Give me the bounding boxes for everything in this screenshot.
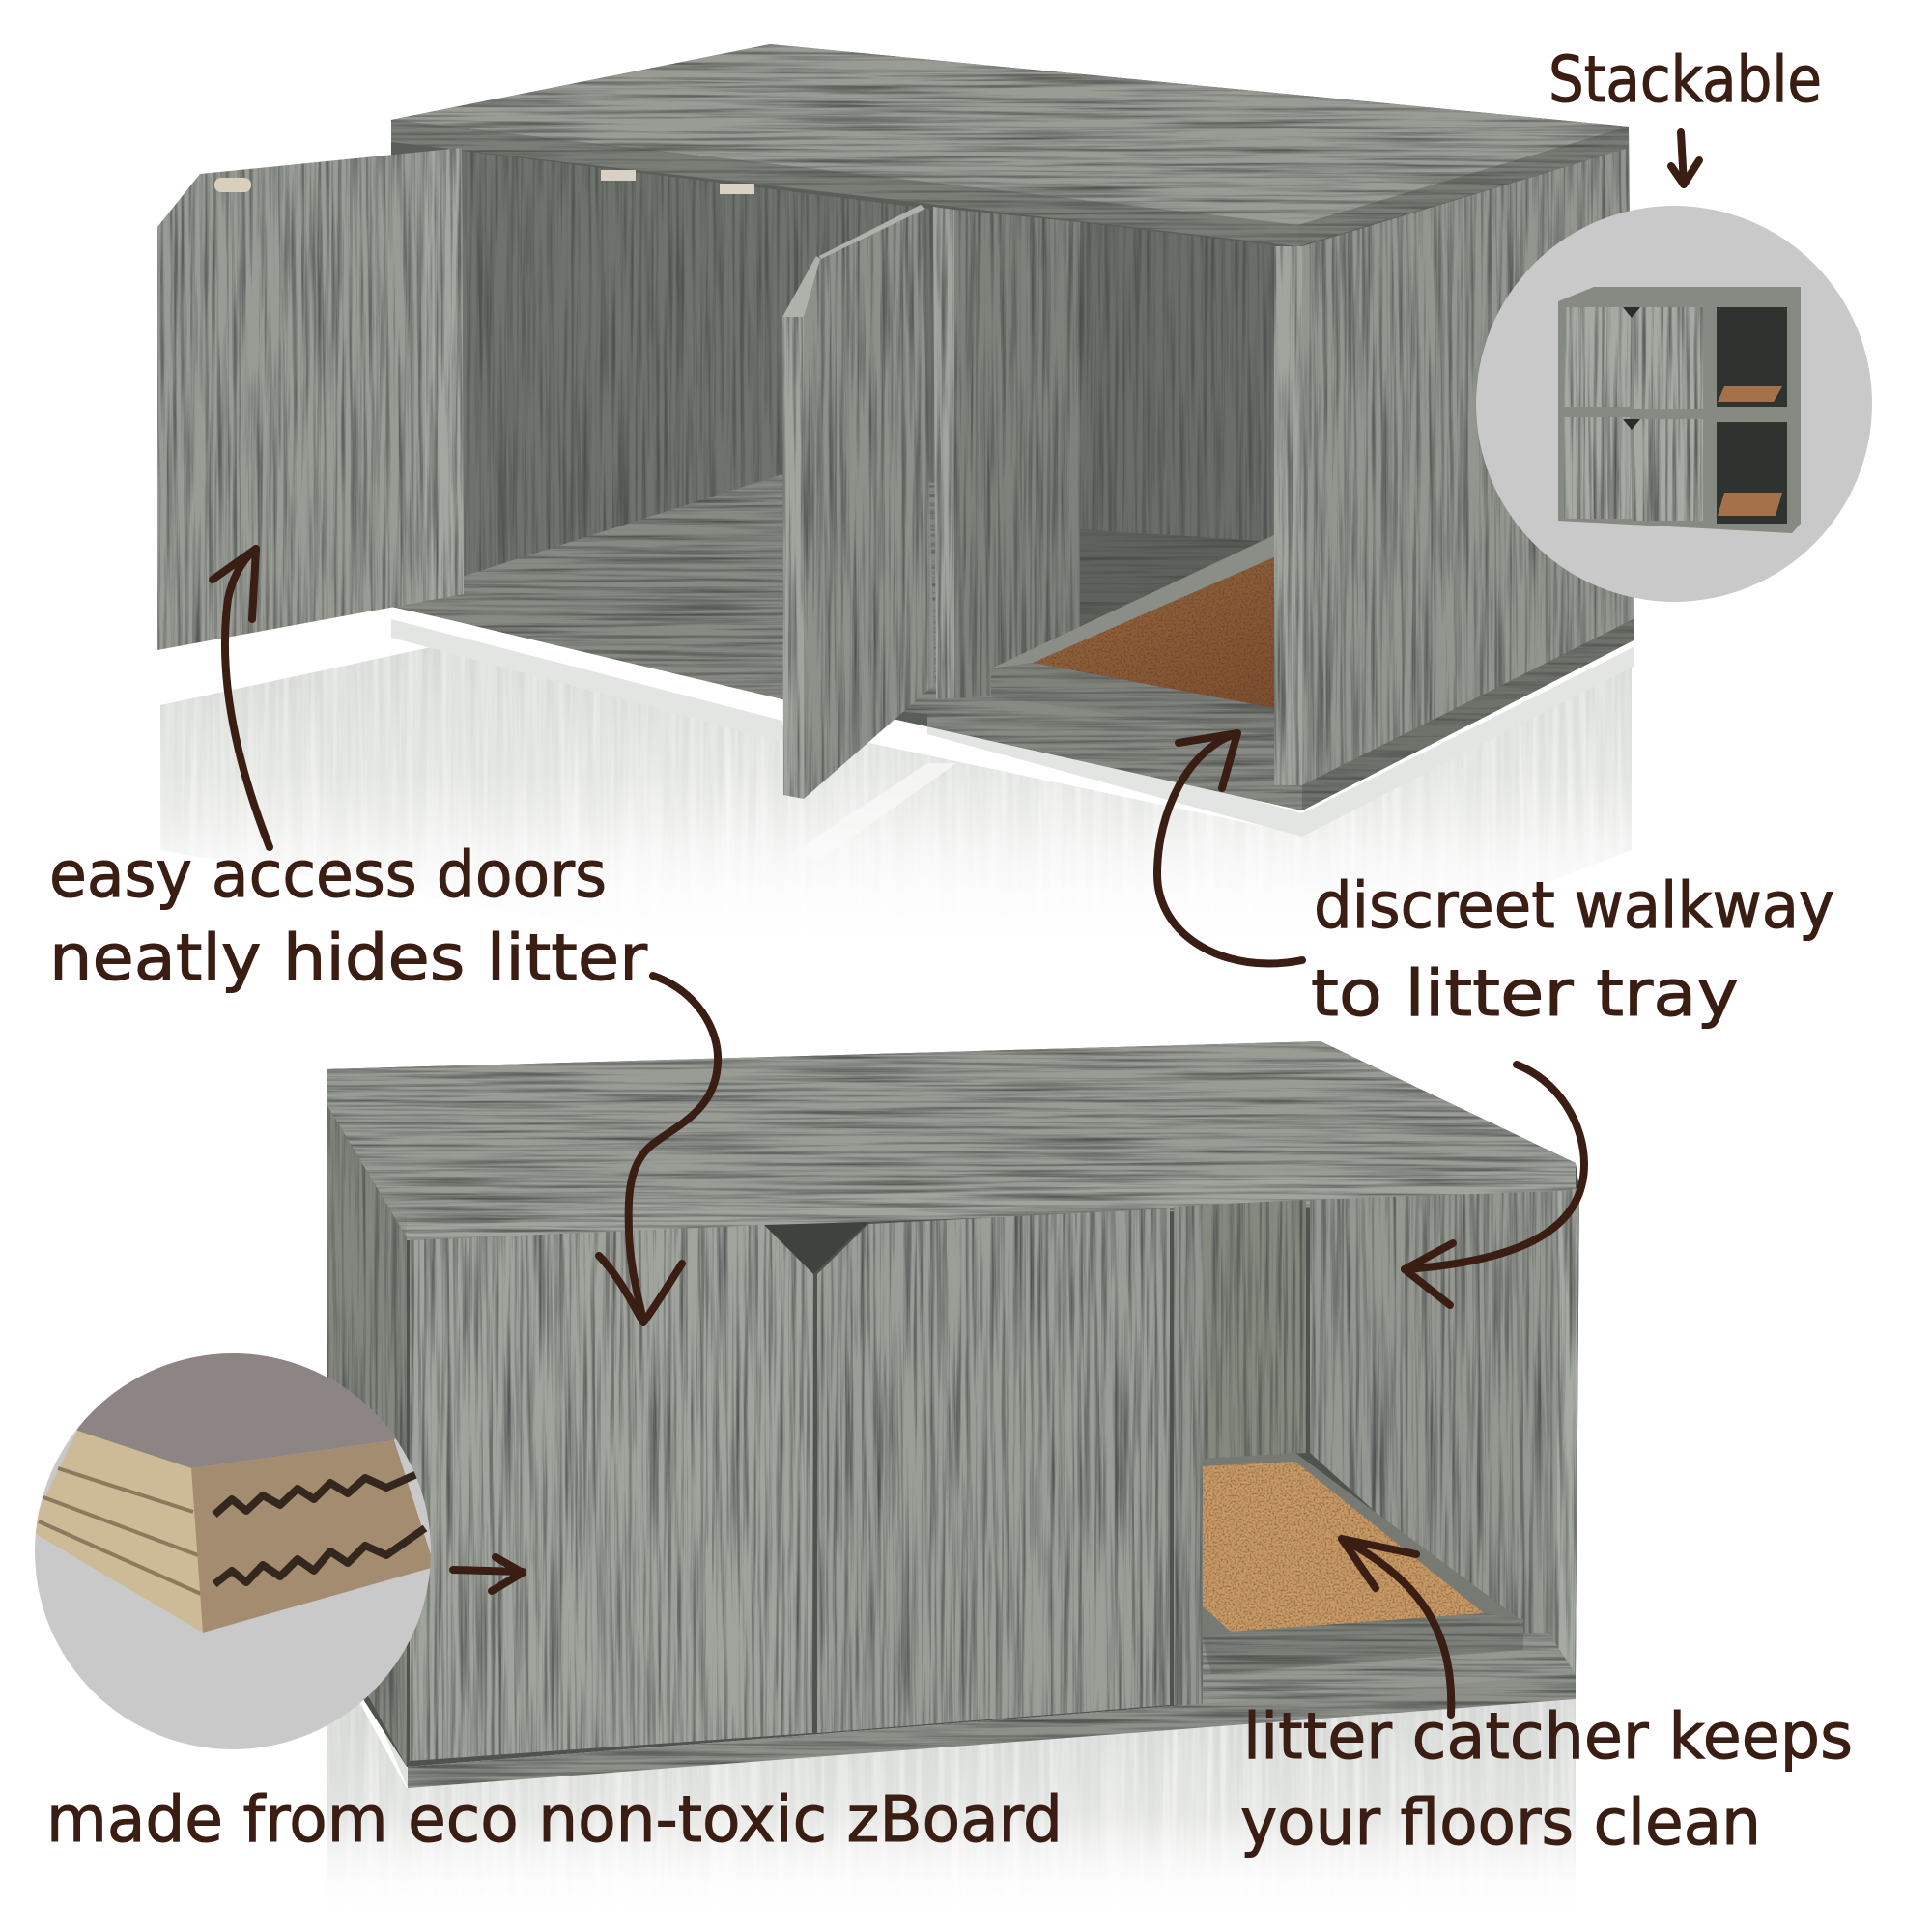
right post	[1557, 1188, 1579, 1674]
door catch plate	[214, 178, 251, 192]
top panel	[327, 1041, 1576, 1237]
divider post	[1174, 1205, 1203, 1705]
litter tray	[1203, 1453, 1523, 1674]
caption: easy access doors: easy access doors	[49, 838, 607, 912]
board right face	[191, 1440, 435, 1633]
open middle door	[782, 205, 935, 799]
top panel	[391, 44, 1629, 225]
hinge brackets	[601, 170, 754, 194]
left door	[410, 1225, 813, 1761]
corrugated board sample	[29, 1352, 435, 1633]
arrow: hides litter	[599, 976, 718, 1322]
board left face	[29, 1431, 203, 1633]
caption: zBoard material: made from eco non-toxic zBoard	[46, 1782, 1063, 1857]
arrow: walkway	[1157, 733, 1302, 964]
chamber floor	[1203, 1633, 1576, 1705]
caption: stackable: Stackable	[1548, 43, 1822, 117]
bottom band	[408, 1674, 1576, 1788]
arrow: to litter tray	[1405, 1065, 1584, 1305]
right chamber side wall	[1203, 1200, 1306, 1459]
right chamber floor	[1080, 529, 1274, 622]
arrow: doors	[213, 549, 270, 847]
upper doors	[1564, 307, 1632, 407]
corrugated flutes	[214, 1473, 425, 1584]
right chamber side wall	[954, 210, 1080, 708]
right door	[817, 1208, 1170, 1733]
lower doors	[1564, 417, 1632, 519]
top panel front edge	[391, 120, 1298, 246]
litter tray	[991, 535, 1274, 736]
panel: zBoard material inset circle	[29, 1352, 435, 1749]
cabinet silhouette	[391, 44, 1634, 810]
right side base band	[1302, 619, 1634, 810]
panel: stackable inset circle	[1476, 206, 1872, 602]
stacked units illustration	[1558, 287, 1801, 533]
caption: easy access doors	[49, 838, 648, 995]
front post	[1274, 246, 1302, 785]
right chamber back wall	[1310, 1191, 1557, 1674]
white floor edge under the bottom cabinet	[370, 1674, 1576, 1788]
white floor edge under the top cabinet	[391, 619, 782, 742]
upper cubby	[1717, 307, 1787, 407]
right chamber back wall	[1080, 222, 1274, 542]
top panel right edge	[1298, 127, 1629, 246]
caption: litter catcher	[1240, 1699, 1853, 1860]
top panel front edge	[407, 1163, 1576, 1240]
left chamber floor	[394, 474, 936, 715]
product: top cabinet with open doors	[157, 44, 1634, 837]
arrow: litter catcher	[1342, 1539, 1451, 1715]
caption: easy access doors: neatly hides litter	[49, 921, 648, 995]
board top face	[77, 1353, 395, 1468]
arrow: stackable	[1671, 132, 1699, 185]
left chamber back wall	[462, 151, 936, 580]
board left face layers	[39, 1468, 201, 1594]
cabinet silhouette	[327, 1041, 1579, 1767]
caption: discreet walkway: to litter tray	[1311, 956, 1739, 1031]
reflection: bottom unit on the floor	[319, 1642, 1584, 1927]
caption: discreet walkway: discreet walkway	[1314, 868, 1834, 943]
reflection: top unit on the floor	[145, 647, 1652, 980]
left side panel	[327, 1104, 407, 1767]
floor front edge	[927, 696, 1302, 810]
lower cubby	[1717, 422, 1787, 524]
arrow: zBoard	[453, 1557, 523, 1591]
caption: litter catcher: litter catcher keeps	[1243, 1699, 1853, 1774]
door notch	[764, 1222, 868, 1274]
open left door	[157, 148, 464, 650]
caption: discreet walkway	[1311, 868, 1834, 1031]
centre divider	[933, 207, 954, 708]
right side panel	[1302, 148, 1634, 785]
caption: litter catcher: your floors clean	[1240, 1785, 1761, 1860]
product: bottom cabinet with closed doors	[327, 1041, 1579, 1788]
